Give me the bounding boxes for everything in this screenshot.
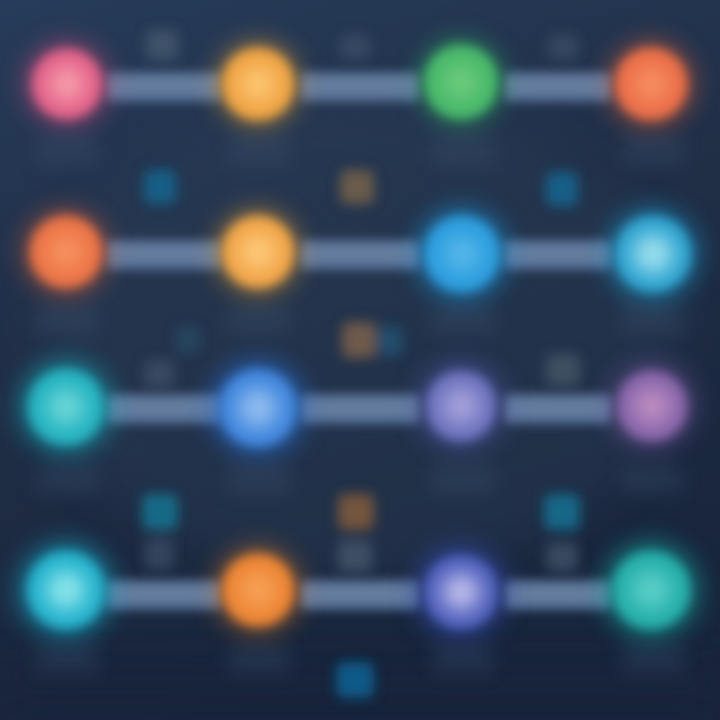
node: blue [414, 206, 510, 302]
node: orange [22, 208, 110, 296]
row 1 nodes [23, 37, 695, 128]
node: blue [208, 358, 308, 458]
node: amber [214, 208, 302, 296]
node: teal [17, 358, 115, 456]
node: orange [214, 546, 302, 634]
node: light blue [605, 206, 701, 302]
node: mauve [607, 361, 697, 451]
row 3 nodes [17, 358, 697, 458]
node: purple [415, 360, 507, 452]
node: cyan [16, 540, 116, 640]
connector bars [106, 72, 612, 610]
node: periwinkle [413, 544, 509, 640]
node: amber [214, 40, 302, 128]
node: orange [607, 40, 695, 128]
small icons above connectors [142, 30, 580, 698]
node: teal [601, 540, 701, 640]
row 4 nodes [16, 540, 701, 640]
node: pink [23, 40, 111, 128]
row 2 nodes [22, 206, 701, 302]
node: green [416, 37, 506, 127]
label placeholders: faint blocks under nodes [36, 135, 684, 673]
